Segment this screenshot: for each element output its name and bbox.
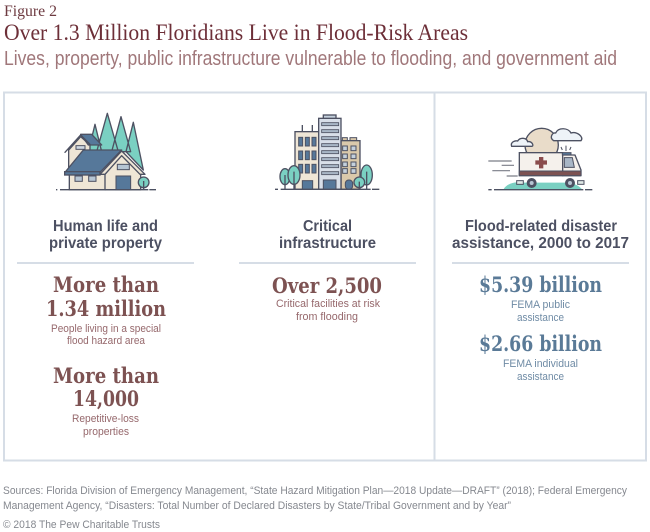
stat: 14,000: More than bbox=[53, 363, 159, 388]
heading bbox=[49, 218, 162, 252]
stat: 1.34 million: More than bbox=[53, 272, 159, 297]
stat label: individual assistance: FEMA individual bbox=[503, 358, 578, 370]
stat label: facilities: Critical facilities at risk bbox=[276, 298, 380, 310]
stat label: people: People living in a special bbox=[51, 323, 161, 335]
stat label: public assistance: assistance bbox=[517, 312, 564, 324]
stat label: individual assistance bbox=[503, 358, 578, 383]
stat: over 2,500: Over 2,500 bbox=[272, 273, 382, 298]
copyright: © 2018 The Pew Charitable Trusts bbox=[3, 519, 160, 531]
panel: flood-related disaster assistance bbox=[452, 128, 629, 383]
stat label: repetitive-loss: Repetitive-loss bbox=[72, 413, 139, 425]
icon: ambulance bbox=[488, 128, 592, 190]
stat label: facilities bbox=[276, 298, 380, 323]
sources: Management Agency, “Disasters: Total Number of Declared Disasters by State/Tribal Government and by Year” bbox=[3, 500, 511, 512]
stat: $2.66 billion: $2.66 billion bbox=[479, 331, 602, 356]
heading bbox=[452, 218, 629, 252]
panel: critical infrastructure bbox=[239, 115, 416, 323]
heading: infrastructure bbox=[279, 235, 376, 252]
stat label: repetitive-loss bbox=[72, 413, 139, 438]
stat: 1.34 million bbox=[46, 272, 166, 321]
stat: $5.39 billion: $5.39 billion bbox=[479, 272, 602, 297]
title: Over 1.3 Million Floridians Live in Flood-Risk Areas bbox=[4, 20, 468, 45]
stat label: public assistance bbox=[511, 299, 570, 324]
heading: Human life and bbox=[53, 218, 158, 235]
heading bbox=[279, 218, 376, 252]
stat label: facilities: from flooding bbox=[296, 311, 358, 323]
heading: Flood-related disaster bbox=[465, 218, 617, 235]
heading: private property bbox=[49, 235, 162, 252]
icon: buildings bbox=[275, 115, 379, 189]
panel: human life and private property bbox=[17, 113, 194, 438]
stat label: individual assistance: assistance bbox=[517, 371, 564, 383]
stat: 14,000 bbox=[53, 363, 159, 411]
stat label: public assistance: FEMA public bbox=[511, 299, 570, 311]
heading: assistance, 2000 to 2017 bbox=[452, 235, 629, 252]
stat: 14,000: 14,000 bbox=[73, 386, 139, 411]
icon: house and trees bbox=[56, 113, 156, 190]
sources bbox=[3, 485, 627, 512]
stat: 1.34 million: 1.34 million bbox=[46, 296, 166, 321]
stat label: repetitive-loss: properties bbox=[83, 426, 129, 438]
figure label: Figure 2 bbox=[4, 3, 57, 20]
panel frame bbox=[4, 92, 646, 460]
heading: Critical bbox=[303, 218, 352, 235]
stat label: people: flood hazard area bbox=[67, 335, 146, 347]
stat label: people bbox=[51, 323, 161, 347]
